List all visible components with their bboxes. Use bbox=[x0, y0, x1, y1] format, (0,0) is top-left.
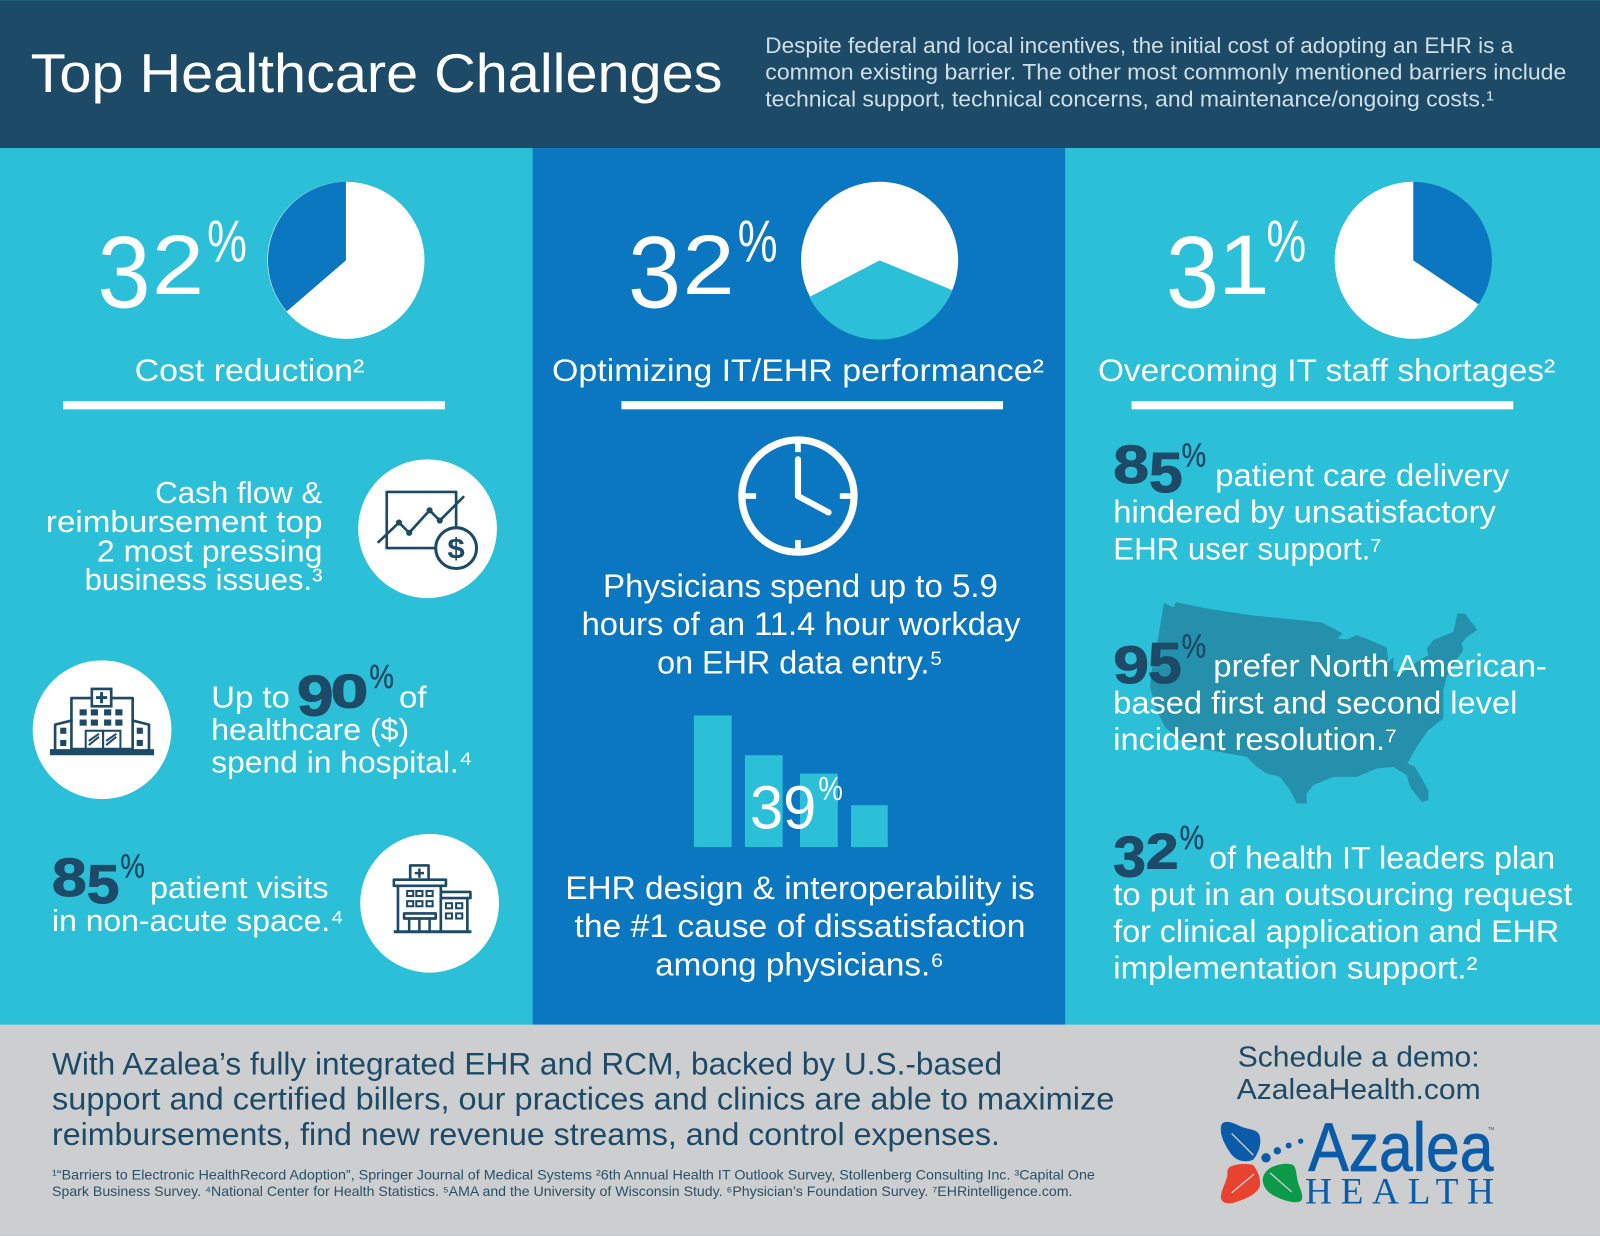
text: 32 percent outsourcing: 3 bbox=[1113, 826, 1146, 890]
text: references bbox=[52, 1168, 1095, 1199]
text: physicians data entry: Physicians spend up to 5.9 bbox=[603, 567, 998, 604]
logo: Azalea Health: TM bbox=[1488, 1126, 1495, 1131]
text: EHR design: the #1 cause of dissatisfaction bbox=[574, 907, 1026, 944]
pie chart: cost reduction bbox=[267, 182, 424, 339]
text: 32 percent outsourcing: implementation support.² bbox=[1113, 950, 1478, 986]
stat: 31 percent: 1 bbox=[1218, 217, 1269, 312]
text: 85 percent: 5 bbox=[87, 853, 119, 915]
icon: clock bbox=[742, 440, 854, 552]
panel: cost reduction bbox=[0, 148, 533, 1025]
stat: 32 percent: 2 bbox=[152, 217, 204, 312]
text: 90 percent: 9 bbox=[297, 664, 334, 728]
text: 85 percent user support: 8 bbox=[1113, 435, 1149, 495]
stat: 31 percent: 3 bbox=[1166, 215, 1219, 329]
text: references: Spark Business Survey. ⁴National Center for Health Statistics. ⁵AMA and the University of Wisconsin Study. ⁶Physician’s Foundation Survey. ⁷EHRintelligence.com. bbox=[52, 1184, 1072, 1199]
map: United States silhouette bbox=[1150, 602, 1477, 803]
text: 85 percent user support: % bbox=[1182, 437, 1206, 474]
text: 95 percent incident resolution: 9 bbox=[1113, 636, 1149, 695]
text: 90 percent: % bbox=[369, 659, 394, 696]
text: cash flow: Cash flow & bbox=[155, 476, 322, 510]
text: cash flow: reimbursement top bbox=[46, 505, 322, 539]
text: 90 percent: 0 bbox=[331, 665, 368, 717]
stat: 32 percent: % bbox=[738, 207, 778, 274]
panel: IT staff shortages bbox=[1065, 148, 1600, 1025]
logo: Azalea Health: Azalea bbox=[1308, 1110, 1493, 1186]
text: 95 percent incident resolution: incident resolution.⁷ bbox=[1113, 721, 1397, 757]
text: 90 percent: of bbox=[399, 680, 427, 714]
icon: chart with dollar: $ bbox=[447, 533, 465, 565]
text: 32 percent outsourcing: of health IT leaders plan bbox=[1209, 840, 1555, 876]
stat: 32 percent bbox=[628, 207, 778, 329]
text: 85 percent: patient visits bbox=[150, 871, 329, 905]
text: 85 percent: in non-acute space.⁴ bbox=[52, 904, 344, 938]
text: 85 percent user support: 5 bbox=[1149, 441, 1183, 504]
icon: clinic building bbox=[360, 834, 499, 973]
header band bbox=[0, 0, 1600, 148]
text: schedule a demo: Schedule a demo: bbox=[1238, 1041, 1480, 1073]
text: 32 percent outsourcing: % bbox=[1180, 820, 1204, 857]
stat: 31 percent bbox=[1166, 207, 1306, 329]
stat: 32 percent: 3 bbox=[628, 215, 681, 329]
bar chart: 39 percent bbox=[694, 715, 888, 847]
pie chart: IT/EHR performance bbox=[801, 182, 958, 340]
text: 32 percent outsourcing: to put in an outsourcing request bbox=[1113, 876, 1573, 912]
bar chart: 39 percent: % bbox=[818, 771, 843, 808]
text: physicians data entry: on EHR data entry.⁵ bbox=[657, 644, 943, 681]
text: 95 percent incident resolution: prefer North American- bbox=[1213, 648, 1547, 684]
text: Azalea summary bbox=[52, 1046, 1114, 1152]
text: EHR design: EHR design & interoperability is bbox=[565, 869, 1035, 906]
heading: cost reduction: Cost reduction² bbox=[135, 352, 364, 388]
text: cash flow bbox=[46, 476, 322, 597]
text: 85 percent user support bbox=[1113, 435, 1509, 566]
logo: Azalea Health bbox=[1221, 1110, 1495, 1212]
text: 90 percent bbox=[211, 659, 472, 780]
panel: optimizing IT/EHR bbox=[533, 148, 1065, 1025]
stat: 31 percent: % bbox=[1266, 207, 1306, 274]
text: EHR design bbox=[565, 869, 1035, 983]
text: 95 percent incident resolution: based first and second level bbox=[1113, 684, 1517, 720]
text: Azalea summary: reimbursements, find new revenue streams, and control expenses. bbox=[52, 1116, 1000, 1152]
logo: Azalea Health: HEALTH bbox=[1305, 1171, 1494, 1212]
heading: optimizing IT/EHR performance: Optimizing IT/EHR performance² bbox=[552, 352, 1044, 388]
heading: overcoming IT staff shortages: Overcoming IT staff shortages² bbox=[1098, 352, 1555, 388]
text: 95 percent incident resolution: % bbox=[1182, 628, 1206, 665]
icon: hospital bbox=[33, 660, 171, 799]
text: 85 percent user support: hindered by unsatisfactory bbox=[1113, 494, 1496, 530]
stat: 32 percent: 2 bbox=[683, 217, 735, 312]
text: 85 percent user support: patient care delivery bbox=[1215, 457, 1509, 493]
text: 32 percent outsourcing bbox=[1113, 820, 1573, 986]
text: 85 percent: 8 bbox=[52, 848, 87, 908]
text: cash flow: business issues.³ bbox=[85, 563, 322, 597]
pie chart: IT staff shortages bbox=[1335, 182, 1492, 339]
text: schedule a demo bbox=[1237, 1041, 1481, 1106]
header description: common existing barrier. The other most commonly mentioned barriers include bbox=[765, 60, 1566, 85]
icon: chart with dollar bbox=[358, 459, 497, 598]
text: 32 percent outsourcing: for clinical application and EHR bbox=[1113, 913, 1559, 949]
header description bbox=[765, 33, 1566, 111]
text: 90 percent: healthcare ($) bbox=[211, 713, 409, 747]
text: 32 percent outsourcing: 2 bbox=[1146, 824, 1179, 880]
text: 95 percent incident resolution bbox=[1113, 628, 1547, 757]
text: physicians data entry bbox=[582, 567, 1021, 681]
text: 85 percent bbox=[52, 848, 344, 938]
text: EHR design: among physicians.⁶ bbox=[655, 946, 944, 983]
stat: 32 percent bbox=[97, 207, 247, 329]
title: Top Healthcare Challenges bbox=[31, 42, 722, 104]
stat: 32 percent: 3 bbox=[97, 215, 151, 329]
text: 90 percent: Up to bbox=[211, 680, 290, 714]
text: schedule a demo: AzaleaHealth.com bbox=[1237, 1074, 1481, 1106]
text: Azalea summary: support and certified billers, our practices and clinics are able to maximize bbox=[52, 1080, 1114, 1116]
stat: 32 percent: % bbox=[207, 207, 247, 274]
text: cash flow: 2 most pressing bbox=[97, 534, 322, 568]
text: 85 percent: % bbox=[120, 849, 145, 886]
bar chart: 39 percent: 39 bbox=[750, 774, 816, 842]
text: Azalea summary: With Azalea’s fully integrated EHR and RCM, backed by U.S.-based bbox=[52, 1046, 1002, 1082]
text: 90 percent: spend in hospital.⁴ bbox=[211, 746, 472, 780]
text: 85 percent user support: EHR user support.⁷ bbox=[1113, 530, 1382, 566]
text: 95 percent incident resolution: 5 bbox=[1148, 632, 1182, 696]
panel: footer bbox=[0, 1025, 1600, 1236]
header description: technical support, technical concerns, and maintenance/ongoing costs.¹ bbox=[765, 86, 1494, 111]
text: physicians data entry: hours of an 11.4 hour workday bbox=[582, 605, 1021, 642]
header description: Despite federal and local incentives, the initial cost of adopting an EHR is a bbox=[765, 33, 1514, 58]
text: references: ¹“Barriers to Electronic HealthRecord Adoption”, Springer Journal of Medical Systems ²6th Annual Health IT Outlook Survey, Stollenberg Consulting Inc. ³Capital One bbox=[52, 1168, 1095, 1183]
